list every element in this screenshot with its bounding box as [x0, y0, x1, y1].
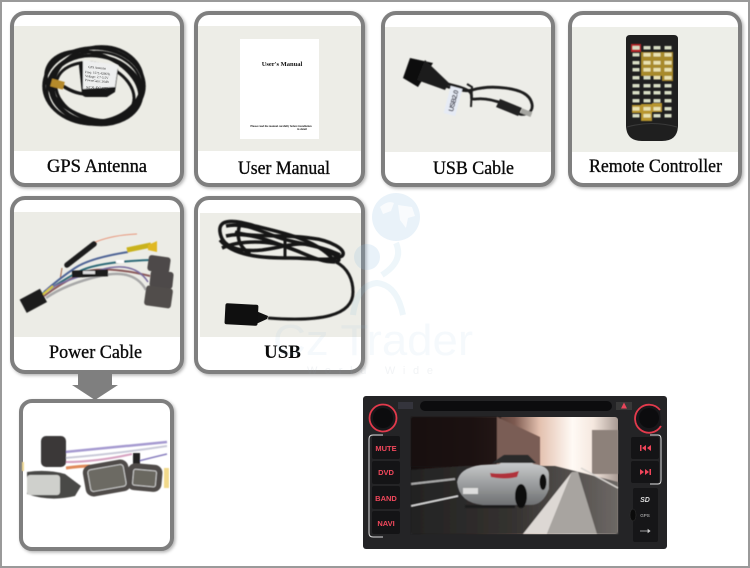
antenna label text [85, 65, 111, 91]
panel: Power Cable [12, 198, 182, 372]
photo: GPS antenna [14, 26, 180, 151]
photo: user manual [198, 26, 361, 151]
right knob [635, 405, 661, 433]
label: USB Cable: USB Cable [433, 158, 514, 179]
media panel [630, 488, 658, 542]
label: USB: USB [264, 342, 301, 363]
watermark person [353, 243, 403, 315]
left buttons: MUTE [375, 444, 397, 453]
photo: USB cable [385, 27, 551, 152]
photo: remote controller [572, 27, 738, 152]
hazard button [616, 402, 632, 410]
disc slot [420, 401, 612, 411]
photo: USB cable: USB2.0 [448, 89, 461, 113]
left buttons: DVD [378, 468, 394, 477]
photo: USB cable coil [200, 213, 361, 337]
panel: USB [196, 198, 363, 372]
remote buttons [631, 44, 673, 121]
watermark globe [372, 193, 420, 241]
panel: Remote Controller [570, 13, 740, 185]
label: Remote Controller: Remote Controller [589, 156, 723, 177]
antenna label text: PowerGain: 26dB [85, 78, 110, 84]
right buttons [631, 435, 661, 484]
antenna label text: GPS Antenna [88, 65, 107, 71]
photo: wiring connectors [22, 436, 169, 499]
label: User Manual: User Manual [238, 158, 330, 179]
photo: user manual: User's Manual [262, 61, 303, 68]
photo: power cable [14, 212, 180, 337]
panel: USB Cable [383, 13, 553, 185]
antenna label text: Freq: 1575.42MHz [85, 70, 111, 76]
media panel: SD [640, 497, 650, 504]
IR window [398, 402, 413, 409]
photo: user manual: in detail [297, 128, 307, 131]
watermark tagline: World Wide [307, 365, 433, 377]
car [457, 455, 549, 508]
left buttons: BAND [375, 494, 397, 503]
screen image: convertible on road [411, 417, 618, 534]
left buttons [369, 435, 400, 537]
watermark: Cz Trader logo [273, 193, 473, 377]
watermark name: Cz Trader [273, 316, 473, 365]
panel: GPS Antenna [12, 13, 182, 185]
left buttons: NAVI [377, 519, 395, 528]
photo: user manual: Please read the manual carefully before installation [250, 125, 312, 128]
arrow: down [72, 374, 118, 400]
head unit: car stereo [363, 396, 667, 549]
antenna label text: SGS FC CE [86, 85, 108, 91]
panel: connector close-up [21, 401, 172, 549]
label: GPS Antenna: GPS Antenna [47, 156, 148, 177]
media panel: GPS [640, 513, 650, 518]
label: Power Cable: Power Cable [49, 342, 142, 363]
left knob [370, 404, 396, 432]
panel: User Manual [196, 13, 363, 185]
antenna label text: Voltage: 2.7-5.5V [85, 74, 109, 80]
